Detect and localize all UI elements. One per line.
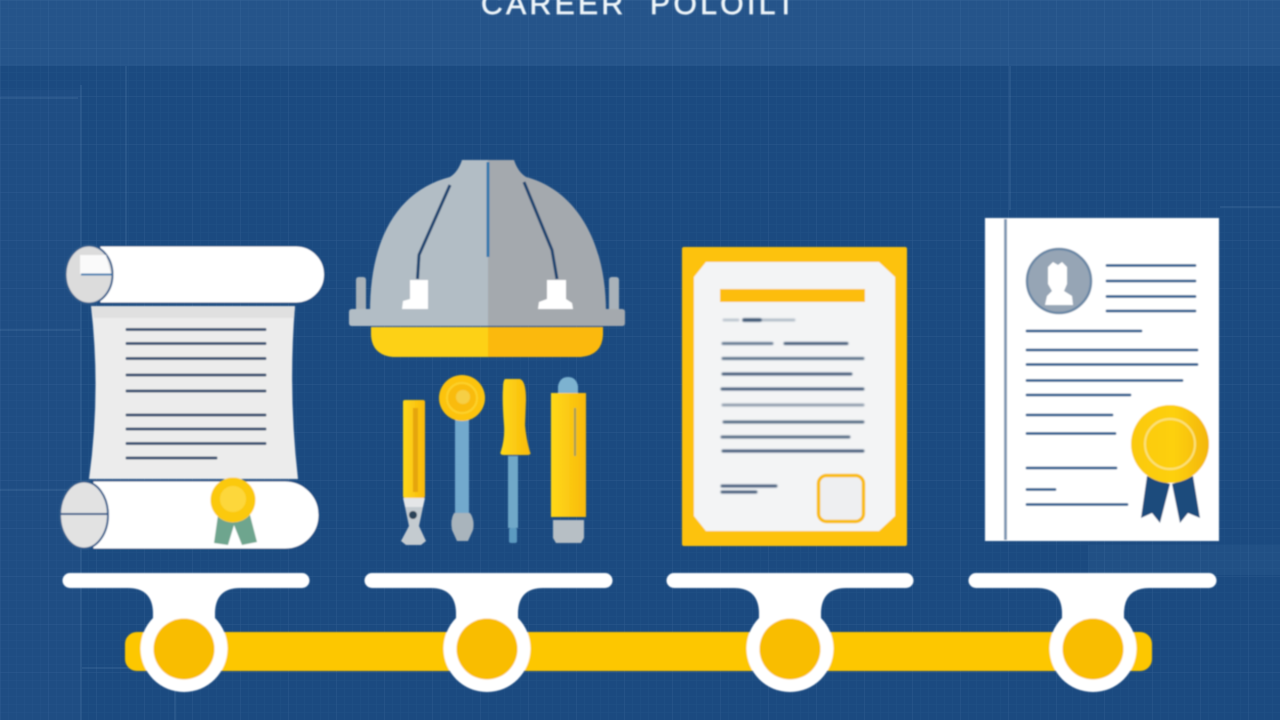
hat brim bbox=[349, 309, 488, 326]
resume text lines bbox=[1027, 266, 1197, 504]
milestone 4 bbox=[969, 573, 1217, 692]
milestone 2 bbox=[365, 573, 613, 692]
scroll sheet with text lines bbox=[89, 306, 298, 479]
resume portrait bbox=[1027, 249, 1091, 313]
icon: hard hat bbox=[349, 160, 625, 357]
timeline yellow bar bbox=[125, 632, 1152, 671]
hat dome bbox=[370, 160, 488, 312]
milestone 3 bbox=[666, 573, 914, 692]
resume seal bbox=[1131, 405, 1209, 483]
icon: diploma scroll bbox=[60, 246, 324, 549]
tool: round wrench bbox=[439, 375, 485, 541]
icon: certificate with yellow frame bbox=[682, 247, 907, 546]
scroll bottom roll bbox=[60, 481, 319, 549]
certificate heading bar bbox=[720, 289, 865, 302]
tool: chisel bbox=[401, 400, 426, 545]
milestone 1 bbox=[63, 573, 310, 692]
certificate paper bbox=[694, 262, 895, 531]
timeline bbox=[63, 573, 1217, 692]
resume page bbox=[985, 218, 1219, 541]
scroll top roll bbox=[66, 246, 324, 304]
hat pegs bbox=[356, 277, 619, 312]
resume spine line bbox=[1004, 219, 1007, 540]
certificate frame bbox=[682, 247, 907, 546]
resume ribbons bbox=[1141, 476, 1200, 523]
certificate stamp bbox=[818, 476, 864, 522]
icon: tool set bbox=[401, 375, 586, 545]
hat visor bbox=[371, 327, 488, 357]
tool: screwdriver bbox=[500, 379, 530, 543]
certificate blurred lines bbox=[722, 320, 863, 492]
tool: pen bbox=[551, 377, 586, 543]
scroll seal with green ribbons bbox=[210, 478, 257, 545]
hat ridge lines bbox=[486, 162, 490, 257]
icon: resume document with seal bbox=[985, 218, 1219, 541]
hat white clips bbox=[402, 280, 573, 309]
